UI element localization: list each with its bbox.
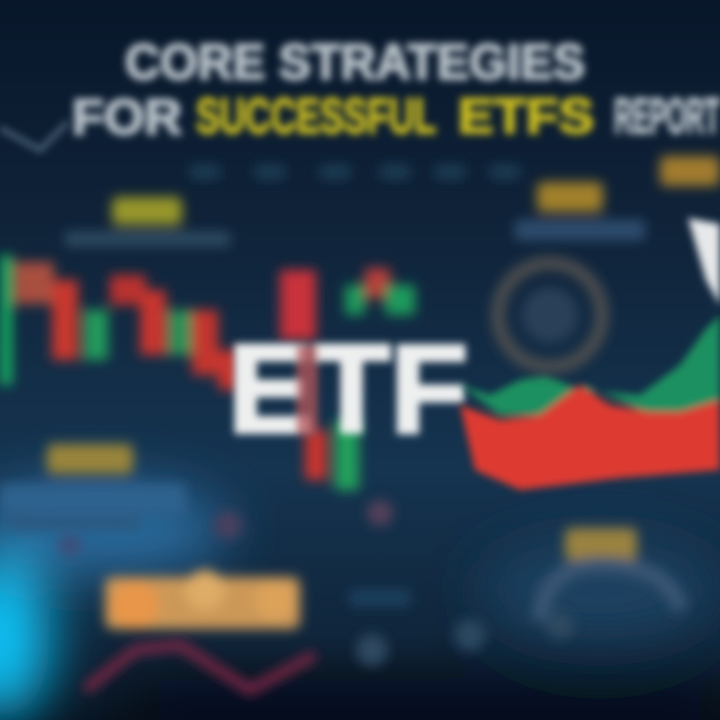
candlestick chart left	[0, 255, 415, 490]
title: FOR	[72, 89, 182, 145]
white arrow	[688, 218, 720, 305]
lower left label	[0, 444, 185, 530]
title	[72, 34, 720, 145]
line under title	[0, 122, 68, 150]
ETF white letters: ETF	[228, 320, 468, 459]
title: ETFS	[458, 88, 594, 144]
coin icon	[498, 263, 602, 367]
title: SUCCESSFUL	[196, 88, 436, 144]
small markers	[58, 500, 393, 557]
orange badges	[105, 570, 300, 629]
lower red line	[85, 645, 315, 690]
top labels	[65, 156, 720, 246]
title: CORE STRATEGIES	[125, 34, 585, 90]
background glow	[0, 485, 720, 720]
red area chart right	[460, 315, 720, 490]
lower right panel	[350, 528, 680, 666]
